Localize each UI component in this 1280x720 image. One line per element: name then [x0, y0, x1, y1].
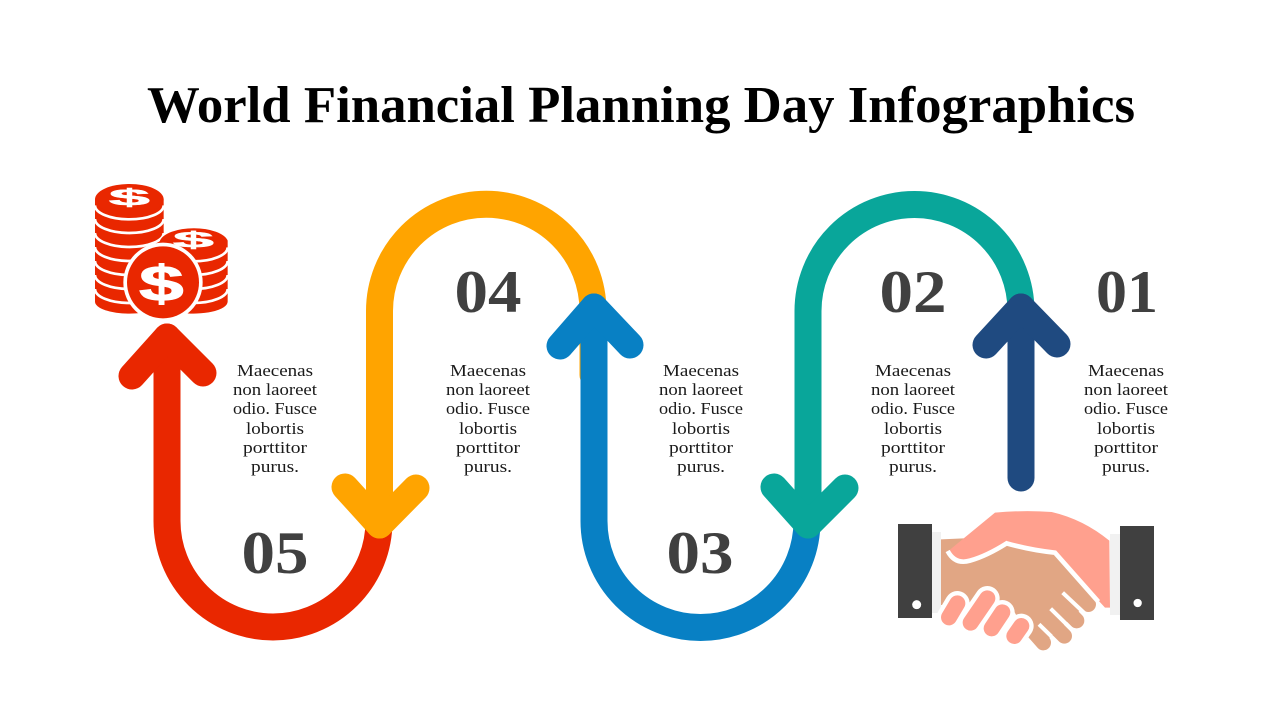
left cuff [898, 524, 941, 618]
front coin: $ [139, 257, 184, 312]
arrow: step 02 teal [774, 204, 1021, 525]
short coin stack: $ [173, 227, 214, 252]
text block: step 05: lobortis [246, 419, 304, 438]
text block: step 05 [233, 361, 317, 476]
tall coin stack: $ [109, 184, 150, 210]
number 05: 05 [242, 520, 308, 586]
text block: step 02 [871, 361, 955, 476]
number 04: 04 [454, 259, 522, 325]
text block: step 04: porttitor [456, 438, 520, 457]
text block: step 03: lobortis [672, 419, 730, 438]
text block: step 05: odio. Fusce [233, 399, 317, 418]
text block: step 05: non laoreet [233, 380, 317, 399]
text block: step 02: Maecenas [875, 361, 951, 380]
text block: step 03: non laoreet [659, 380, 743, 399]
text block: step 01: non laoreet [1084, 380, 1168, 399]
text block: step 01: porttitor [1094, 438, 1158, 457]
text block: step 04: Maecenas [450, 361, 526, 380]
text block: step 01: odio. Fusce [1084, 399, 1168, 418]
text block: step 01: lobortis [1097, 419, 1155, 438]
text block: step 01 [1084, 361, 1168, 476]
text block: step 02: odio. Fusce [871, 399, 955, 418]
text block: step 02: lobortis [884, 419, 942, 438]
text block: step 05: purus. [251, 457, 299, 476]
text block: step 01: Maecenas [1088, 361, 1164, 380]
text block: step 04: non laoreet [446, 380, 530, 399]
title: World Financial Planning Day Infographics [147, 77, 1135, 134]
text block: step 03: purus. [677, 457, 725, 476]
number 01: 01 [1096, 259, 1158, 325]
arrow: step 01 navy [986, 307, 1057, 478]
pink hand [948, 511, 1110, 608]
text block: step 02: porttitor [881, 438, 945, 457]
text block: step 03: Maecenas [663, 361, 739, 380]
text block: step 04: odio. Fusce [446, 399, 530, 418]
tan hand [941, 538, 1093, 643]
text block: step 05: Maecenas [237, 361, 313, 380]
text block: step 03: odio. Fusce [659, 399, 743, 418]
text block: step 04: lobortis [459, 419, 517, 438]
pink fingers [949, 598, 1021, 636]
text block: step 02: purus. [889, 457, 937, 476]
text block: step 01: purus. [1102, 457, 1150, 476]
arrow: step 04 orange [345, 204, 593, 525]
number 02: 02 [880, 259, 946, 325]
text block: step 04: purus. [464, 457, 512, 476]
text block: step 03 [659, 361, 743, 476]
text block: step 03: porttitor [669, 438, 733, 457]
arrow: step 03 blue [560, 307, 807, 628]
icon: coin stacks with dollar signs [95, 184, 228, 322]
arrow: step 05 red [132, 337, 379, 627]
icon: handshake [898, 511, 1154, 643]
text block: step 02: non laoreet [871, 380, 955, 399]
right cuff [1110, 526, 1154, 620]
text block: step 04 [446, 361, 530, 476]
number 03: 03 [666, 520, 734, 586]
text block: step 05: porttitor [243, 438, 307, 457]
